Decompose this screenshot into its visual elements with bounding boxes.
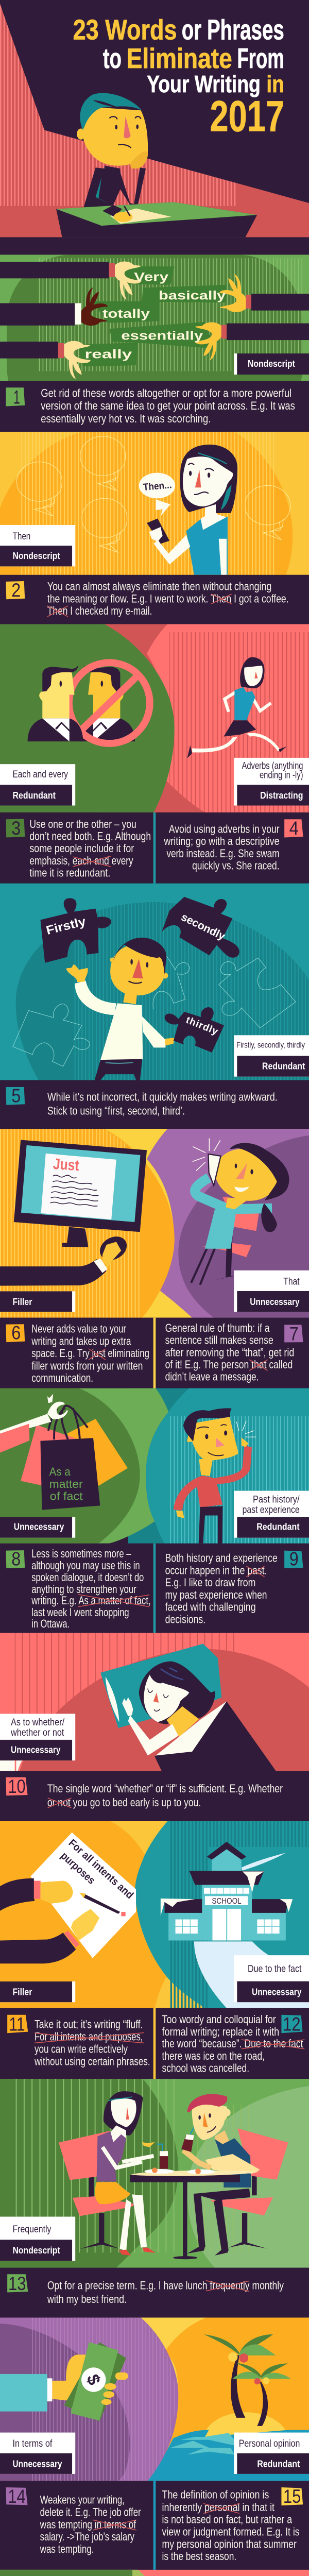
title: From [237,42,284,74]
water [148,2430,309,2481]
stripes right [197,2105,253,2252]
panel: tip 2 text [0,575,309,624]
tip 8 text: spoken dialogue, it doesn’t do [31,1571,144,1584]
panel: tips 3 and 4 text [0,812,309,884]
badge 8: 8 [11,1548,21,1569]
tag: Filler [0,1291,75,1312]
icon: paper with hands and pencil: For all intents and [66,1837,135,1901]
tip 3 text: time it is redundant. [29,866,110,879]
green background [0,2079,309,2268]
tag: Filler: Filler [12,1296,32,1307]
tip 9 text: Both history and experience [165,1551,278,1564]
teal region [146,1388,309,1544]
icon: running woman [187,657,287,758]
tag: Past history / Redundant [234,1491,309,1538]
stripes [168,1416,309,1544]
divider [153,1318,156,1388]
tag: Due to the fact / Unnecessary: Unnecessary [252,1986,302,1997]
tip 8 text: although you may use this in [31,1559,140,1572]
wall stripes [0,0,237,206]
badge 8 [6,1548,25,1569]
word: totally: totally [102,307,150,321]
badge 15: 15 [283,2486,301,2507]
badge 5: 5 [11,1085,21,1106]
puzzle piece: Firstly [40,898,111,963]
tag: Then / Nondescript: Nondescript [12,550,60,561]
badge 4: 4 [289,818,299,839]
sand [203,2412,288,2467]
speech bubble: Then... [139,473,175,516]
panel: For all intents and purposes / Due to the fact [0,1821,309,2008]
word: really [0,341,138,379]
icon: school building with snow [161,1842,293,1940]
tag: Firstly, secondly, thirdly / Redundant [234,1035,309,1077]
dark teal background [128,1388,309,1544]
panel: Firstly, secondly, thirdly [0,884,309,1080]
puzzle piece: thirdly: thirdly [184,1015,219,1038]
panel: tip 10 text [0,1771,309,1821]
panel: In terms of / Personal opinion [0,2317,309,2481]
stripes [169,632,309,812]
icon: sleeping woman [100,1644,276,1771]
tip 6 text: communication. [31,1371,93,1384]
dark coral mound [20,1649,309,1771]
band [0,575,309,624]
panel: In the process of / With the possible exception of [0,2570,309,2576]
orange region [0,1129,175,1318]
tip 9 text [165,1551,278,1625]
lighter green region [187,2086,309,2268]
tip text [47,580,289,617]
icon: woman with phone [147,445,237,575]
tip 11 text: without using certain phrases. [34,2055,150,2067]
badge 7: 7 [289,1323,299,1344]
tip 8 text: anything to strengthen your [31,1583,136,1596]
title: 23 Words [73,14,177,46]
tip 14 text: salary. ->The job’s salary [40,2530,135,2543]
tag: Unnecessary [0,1517,75,1538]
badge 3: 3 [11,818,21,839]
icon: woman dining [95,2091,156,2256]
icon: man thinking at desk [77,93,148,217]
tip 8 text: last week I went shopping [31,1606,129,1619]
tip 15 text [162,2488,300,2563]
yellow wedge background [128,2317,309,2481]
puzzle piece: secondly [162,897,239,958]
badge 5 [6,1085,25,1106]
tip 14 text: delete it. E.g. The job offer [40,2505,141,2518]
tip 3 text: don’t need both. E.g. Although [29,829,151,842]
panel: tips 14 and 15 text [0,2481,309,2570]
tag: As to whether / Unnecessary [0,1714,75,1760]
orange blob [0,432,293,575]
icon: paper with hands and pencil [0,1833,136,1963]
band [0,2268,309,2317]
green circle [0,624,175,812]
table [130,2167,259,2259]
yellow background [0,432,309,575]
orange region [0,1821,166,2008]
tag: Each and every / Redundant [0,764,75,806]
badge 3 [6,818,25,839]
tip 14 text: was tempting. [40,2543,94,2555]
puzzle piece: Firstly: Firstly [45,915,88,938]
tag: Frequently / Nondescript: Nondescript [12,2245,60,2256]
tip 6 text: writing and takes up extra [31,1334,131,1347]
dark green blob [7,255,303,381]
left chair [59,2131,136,2249]
tip 8 text: writing. E.g. As a matter of fact, [31,1594,151,1607]
badge 6: 6 [11,1323,21,1344]
light green region [0,1388,168,1544]
tip 9 text: E.g. I like to draw from [165,1576,255,1589]
tip 11 text: For all intents and purposes, [35,2030,143,2043]
yellow wedge background [98,1821,309,2008]
tip text [47,1782,283,1809]
tip text [47,1091,278,1117]
tip 12 text [162,2013,304,2075]
stripes [74,902,309,1080]
tag: Nondescript [234,353,309,375]
badge 4 [284,818,303,839]
badge 2: 2 [11,580,21,601]
orange region [148,2317,309,2481]
coral background [128,2570,309,2576]
tip 11 text [34,2018,150,2067]
tip 14 text [40,2493,141,2555]
tip 7 text: General rule of thumb: if a [165,1321,270,1334]
tag: Past history / Redundant: Redundant [256,1521,300,1532]
dark green region [0,2079,178,2268]
divider [153,2481,156,2570]
purple region [147,1129,309,1318]
tip 4 text: quickly vs. She raced. [192,859,280,872]
badge 2 [6,580,25,601]
badge 6 [6,1323,25,1344]
band [0,812,309,884]
stripes [169,1821,309,2008]
tip 4 text: verb instead. E.g. She swam [166,847,280,860]
puzzle piece: secondly: secondly [179,911,227,942]
tag: Nondescript: Nondescript [248,358,295,369]
tag: Personal opinion / Redundant: Redundant [257,2459,300,2469]
white corner [0,1760,22,1771]
tag: Frequently / Nondescript [0,2217,75,2261]
panel: As a matter of fact / Past history [0,1388,309,1544]
icon: arm holding bags [0,1394,68,1453]
coral background [0,1633,309,1771]
band [0,1080,309,1129]
divider [153,2008,156,2079]
panel: tips 8 and 9 text [0,1544,309,1633]
panel background [0,255,309,381]
word: totally [0,287,160,326]
lime region [0,2570,174,2576]
dark purple blob [178,1136,309,1318]
icon: computer monitor: Just [53,1156,80,1174]
tip 9 text: my past experience when [165,1588,267,1601]
icon: hand holding money: $ [82,2372,104,2388]
tip 3 text: Use one or the other – you [29,818,136,831]
icon: two identical men with prohibition sign [28,663,150,743]
tag: Personal opinion / Redundant [234,2433,309,2474]
panel: hands holding words [0,255,309,432]
title: 2017 [210,92,284,140]
outlined puzzle pieces [13,956,296,1066]
panel: tips 11 and 12 text [0,2008,309,2079]
stripes [15,1633,238,1715]
icon: computer monitor [14,1140,147,1247]
badge 9 [284,1548,303,1569]
icon: hand on mouse [0,1232,131,1286]
tip 11 text: you can write effectively [35,2043,128,2056]
icon: paper with hands and pencil: purposes [58,1850,97,1887]
tip 4 text [164,822,280,872]
tag: In terms of / Unnecessary [0,2433,75,2474]
title: to [103,42,122,74]
badge 14: 14 [8,2486,26,2507]
desk [56,202,257,237]
panel: tip 5 text [0,1080,309,1129]
panel: Each and every / Adverbs [0,624,309,812]
tag: Then / Nondescript: Then [12,531,30,542]
divider [153,1544,156,1633]
tip 3 text: some people include it for [29,842,134,855]
tip 6 text: space. E.g. Try just eliminating [31,1347,149,1360]
icon: man with puzzle piece [66,938,175,1080]
tag: Unnecessary: Unnecessary [14,1521,64,1532]
badge 7 [284,1323,303,1344]
tip 7 text: didn’t leave a message. [165,1370,259,1383]
band [0,1318,309,1388]
stripes [30,2317,176,2481]
panel: tips 6 and 7 text [0,1318,309,1388]
tip 12 text: formal writing; replace it with [162,2025,279,2038]
stripes left [9,2079,175,2252]
tip 3 text: emphasis, each and every [29,854,133,867]
yellow wedge background [98,1129,309,1318]
icon: school building with snow: SCHOOL [212,1897,242,1906]
tip 14 text: Weakens your writing, [40,2493,125,2506]
band [0,1544,309,1633]
band [0,2481,309,2570]
tip 14 text: was tempting in terms of [40,2518,136,2531]
tip 4 text: Avoid using adverbs in your [169,822,280,835]
tip text [41,386,295,425]
badge 13: 13 [8,2273,26,2294]
icon: drink on table [157,2144,168,2169]
dark coral background [98,624,309,812]
purple region [0,2317,178,2481]
coral wall [0,4,309,237]
title: Eliminate [127,42,232,74]
tip text: or not you go to bed early is up to you. [47,1796,201,1809]
tag: As to whether / Unnecessary: As to whether/ [11,1717,65,1728]
tip 15 text: The definition of opinion is [162,2488,269,2501]
badge 1 [6,387,25,408]
stripes [0,1129,142,1318]
title: in [266,71,284,97]
tip text: Then I checked my e-mail. [47,604,152,617]
tip text: with my best friend. [47,2293,127,2306]
tip 8 text: Less is sometimes more – [31,1547,131,1560]
dark green blob [0,1388,140,1544]
panel: As to whether [0,1633,309,1771]
icon: man snapping fingers [174,1408,256,1544]
tag: Due to the fact / Unnecessary [234,1955,309,2002]
word: Very [0,261,175,300]
tip 7 text: sentence still makes sense [165,1334,273,1347]
band [0,1771,309,1821]
tip 12 text: Too wordy and colloquial for [162,2013,276,2026]
tag: Frequently / Nondescript: Frequently [12,2224,52,2235]
tag: As to whether / Unnecessary: Unnecessary [11,1744,61,1755]
tip text: essentially very hot vs. It was scorching. [41,412,211,425]
badge 9: 9 [289,1548,299,1569]
tag: Adverbs / Distracting: Distracting [260,790,303,801]
panel: hero with title [0,0,309,255]
stripes [38,258,303,371]
tag: Adverbs / Distracting [234,758,309,806]
tag: That / Unnecessary [234,1270,309,1312]
tip 9 text: decisions. [165,1613,205,1625]
word: basically: basically [159,289,226,303]
icon: palm trees [204,2334,290,2426]
tip 3 text [29,818,151,879]
panel: Just / That [0,1129,309,1318]
dark purple blob [0,2324,130,2481]
tip 7 text [165,1321,294,1383]
tag: In terms of / Unnecessary: Unnecessary [12,2459,62,2469]
title: Your Writing [147,71,261,97]
badge 11: 11 [9,2013,25,2035]
dark green hill [0,2570,132,2576]
tip 4 text: writing; go with a descriptive [164,835,280,848]
badge 12: 12 [283,2013,301,2035]
tag: Each and every / Redundant: Each and every [12,769,68,780]
badge 1: 1 [13,387,20,408]
tag: As to whether / Unnecessary: whether or not [10,1727,64,1738]
panel: Then [0,432,309,575]
ice patch [194,1941,309,2008]
tag: Then / Nondescript [0,525,75,566]
dark teal blob [16,902,309,1080]
tip text [47,2279,284,2306]
tip 8 text [31,1547,151,1630]
hero dark background [0,0,309,255]
title [73,14,284,140]
teal region [135,1821,309,2008]
panel: Frequently dinner date [0,2079,309,2268]
tip 9 text: occur happen in the past. [165,1564,267,1577]
icon: shopping bags: of fact [50,1490,83,1503]
tag: Filler: Filler [12,1986,32,1997]
icon: shopping bags [21,1405,128,1510]
tip 8 text: in Ottawa. [31,1617,70,1630]
tip 11 text: Take it out; it’s writing “fluff. [35,2018,143,2031]
tag: That / Unnecessary: Unnecessary [250,1296,300,1307]
tip 6 text: Never adds value to your [31,1323,126,1335]
tag: Filler [0,1981,75,2002]
tip text: Stick to using “first, second, third’. [47,1105,185,1117]
icon: shopping bags: As a [49,1465,71,1478]
panel: tip 13 text [0,2268,309,2317]
waves [170,2433,246,2454]
tip 15 text: inherently personal in that it [162,2501,274,2514]
panel: tip 1 text [0,381,309,432]
tag: In terms of / Unnecessary: In terms of [12,2438,53,2449]
icon: hand holding money [0,2342,128,2421]
tip 9 text: faced with challenging [165,1601,256,1614]
word: essentially: essentially [121,329,203,343]
icon: woman on phone [191,1138,289,1285]
icon: man drinking [181,2094,260,2256]
puzzle piece: thirdly [165,1007,224,1053]
tag: Each and every / Redundant: Redundant [12,790,56,801]
tip 15 text: is the best season. [162,2550,236,2563]
icon: shopping bags: matter [49,1478,83,1490]
tag: That / Unnecessary: That [283,1277,300,1287]
tip 6 text [31,1323,149,1384]
outlined speech bubbles [17,436,290,553]
word: basically [142,274,309,312]
stripes [19,432,275,575]
right chair [210,2128,288,2249]
band [0,381,309,432]
word: essentially [109,322,309,360]
word: Very: Very [134,270,169,284]
badge 10: 10 [8,1776,26,1797]
coral background [147,624,309,812]
tip 12 text: there was ice on the road, [162,2049,265,2062]
tag: Past history / Redundant: Past history/ [253,1495,300,1505]
word: really: really [85,348,132,362]
band [0,2008,309,2079]
teal background [0,884,309,1080]
tip 6 text: filler words from your written [31,1359,143,1372]
speech bubble: Then...: Then... [143,480,172,493]
tip 12 text: school was cancelled. [162,2062,249,2075]
divider [153,812,156,884]
